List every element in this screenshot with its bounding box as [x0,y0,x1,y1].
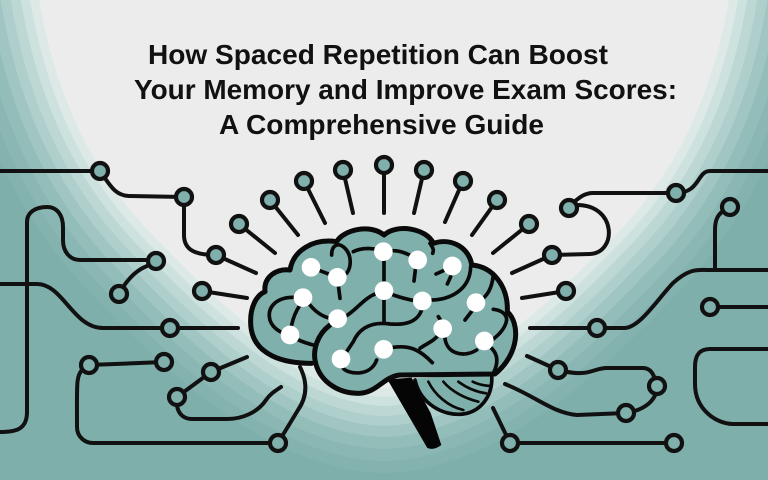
title: How Spaced Repetition Can Boost [148,39,608,70]
brain illustration [251,229,516,449]
cerebrum outline [251,229,516,393]
cerebellum [415,373,492,414]
left circuit nodes [81,163,286,451]
title: A Comprehensive Guide [219,109,544,140]
radial spokes above the brain [239,165,529,253]
title: Your Memory and Improve Exam Scores: [134,74,677,105]
brain folds [269,243,507,373]
white memory nodes [281,242,494,368]
brain stem [387,378,441,449]
title [134,39,677,140]
left circuit traces [0,171,305,443]
spoke nodes [231,157,537,232]
right circuit traces [493,171,768,443]
right circuit nodes [502,185,738,451]
